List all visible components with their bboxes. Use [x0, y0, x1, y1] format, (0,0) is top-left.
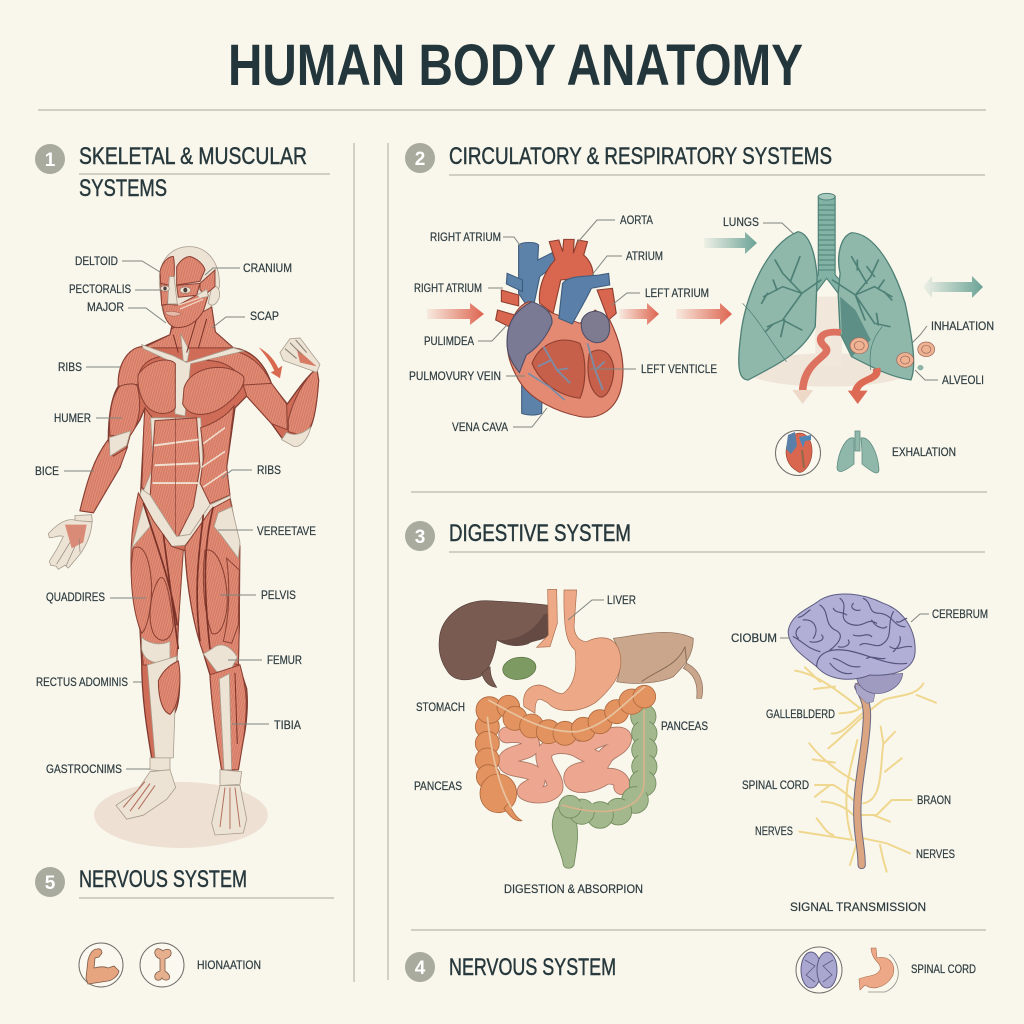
- heading: section 3: 3: [415, 527, 425, 548]
- heart labels: RIGHT ATRIUM: [414, 281, 482, 295]
- digestive labels: STOMACH: [416, 700, 465, 714]
- heart labels: INHALATION: [931, 319, 994, 333]
- figure labels: PECTORALIS: [69, 282, 131, 296]
- figure labels: FEMUR: [267, 653, 302, 667]
- figure labels: RIBS: [58, 360, 82, 374]
- figure labels: CRANIUM: [243, 261, 292, 275]
- large intestine green: [552, 704, 657, 868]
- heart labels: LEFT VENTICLE: [641, 362, 717, 376]
- pancreas: [613, 632, 703, 698]
- heart labels: PULMOVURY VEIN: [409, 369, 501, 383]
- heading: section 2: CIRCULATORY & RESPIRATORY SYSTEMS: [449, 143, 832, 170]
- figure labels: BICE: [35, 464, 59, 478]
- title: HUMAN BODY ANATOMY: [228, 33, 803, 98]
- heart labels: AORTA: [620, 213, 653, 227]
- left leg: [116, 493, 183, 819]
- right leg: [185, 499, 247, 835]
- label: bottom left: HIONAATION: [197, 958, 261, 972]
- icon: bone badge: [140, 943, 184, 987]
- floor shadow under figure: [94, 782, 268, 848]
- digestive labels: PANCEAS: [414, 779, 462, 793]
- figure labels: DELTOID: [75, 254, 118, 268]
- figure labels: QUADDIRES: [46, 590, 105, 604]
- heading: section 4: [405, 952, 616, 982]
- gallbladder: [501, 655, 537, 682]
- lungs illustration: [739, 193, 935, 404]
- label: spinal cord: SPINAL CORD: [911, 962, 976, 976]
- heart labels: [409, 213, 994, 459]
- brain labels: CEREBRUM: [932, 607, 988, 621]
- brain labels: CIOBUM: [731, 631, 777, 645]
- heading: section 2: 2: [415, 149, 425, 170]
- brain labels: [731, 607, 988, 914]
- small intestine: [506, 735, 624, 795]
- heading: section 5: 5: [45, 873, 56, 894]
- nerves: [795, 667, 936, 872]
- cerebrum: [788, 594, 915, 679]
- heading: section 1: [35, 143, 330, 202]
- head: [143, 247, 233, 361]
- heading: section 5: NERVOUS SYSTEM: [79, 866, 247, 893]
- figure labels: TIBIA: [274, 718, 301, 732]
- body silhouette: [80, 307, 319, 770]
- brain labels: GALLEBLDERD: [766, 707, 835, 721]
- heading: section 3: [405, 520, 985, 552]
- heading: section 4: NERVOUS SYSTEM: [449, 954, 616, 981]
- heart labels: RIGHT ATRIUM: [430, 230, 501, 244]
- icon: stomach: [859, 948, 898, 992]
- figure labels: MAJOR: [87, 300, 124, 314]
- figure labels: VEREETAVE: [257, 524, 316, 538]
- heading: section 3: DIGESTIVE SYSTEM: [449, 520, 631, 547]
- icon: heart badge: [776, 430, 820, 476]
- right arm (raised): [207, 338, 320, 447]
- icon: brain badge: [796, 947, 842, 993]
- digestive system illustration: [439, 589, 703, 868]
- arrow: right double arrow: [923, 276, 983, 298]
- spinal cord: [857, 687, 867, 865]
- large intestine orange: [475, 685, 656, 821]
- heading: section 4: 4: [415, 958, 426, 979]
- arrow: out of heart: [619, 303, 659, 325]
- figure labels: RECTUS ADOMINIS: [36, 675, 128, 689]
- figure labels: RIBS: [257, 463, 281, 477]
- heart labels: ALVEOLI: [942, 373, 984, 387]
- heading: section 1: SYSTEMS: [79, 175, 167, 202]
- muscular figure: [48, 247, 320, 835]
- heart labels: VENA CAVA: [452, 420, 508, 434]
- brain labels: NERVES: [755, 824, 793, 838]
- brainstem and cerebellum: [855, 673, 903, 703]
- arrow: towards lungs red: [676, 303, 732, 325]
- heading: section 1: 1: [45, 150, 56, 171]
- heading: section 1: SKELETAL & MUSCULAR: [79, 143, 307, 170]
- figure labels: PELVIS: [261, 588, 296, 602]
- digestive labels: PANCEAS: [661, 719, 708, 733]
- figure labels: [35, 254, 316, 776]
- icon: muscle badge: [79, 943, 123, 987]
- torso: [138, 345, 244, 546]
- digestive labels: [414, 593, 708, 896]
- brain and nerves illustration: [788, 594, 936, 872]
- heart labels: EXHALATION: [892, 445, 956, 459]
- heart labels: PULIMDEA: [424, 334, 474, 348]
- left arm and hand: [48, 347, 162, 569]
- heading: section 5: [35, 866, 334, 898]
- arrow: lungs inhale: [704, 232, 757, 254]
- figure labels: SCAP: [250, 309, 279, 323]
- brain labels: SIGNAL TRANSMISSION: [790, 900, 926, 914]
- heart labels: ATRIUM: [626, 249, 663, 263]
- heart labels: LEFT ATRIUM: [645, 286, 709, 300]
- brain labels: BRAON: [917, 793, 951, 807]
- liver: [439, 601, 554, 687]
- icon: lungs: [837, 431, 879, 473]
- heart illustration: [496, 239, 623, 417]
- brain labels: SPINAL CORD: [742, 778, 809, 792]
- esophagus and stomach: [524, 589, 621, 713]
- brain labels: NERVES: [916, 847, 955, 861]
- figure labels: GASTROCNIMS: [46, 762, 122, 776]
- heart labels: LUNGS: [723, 215, 759, 229]
- digestive labels: DIGESTION & ABSORPION: [504, 882, 643, 896]
- arrow: into heart: [427, 303, 484, 325]
- figure labels: HUMER: [54, 411, 91, 425]
- digestive labels: LIVER: [607, 593, 636, 607]
